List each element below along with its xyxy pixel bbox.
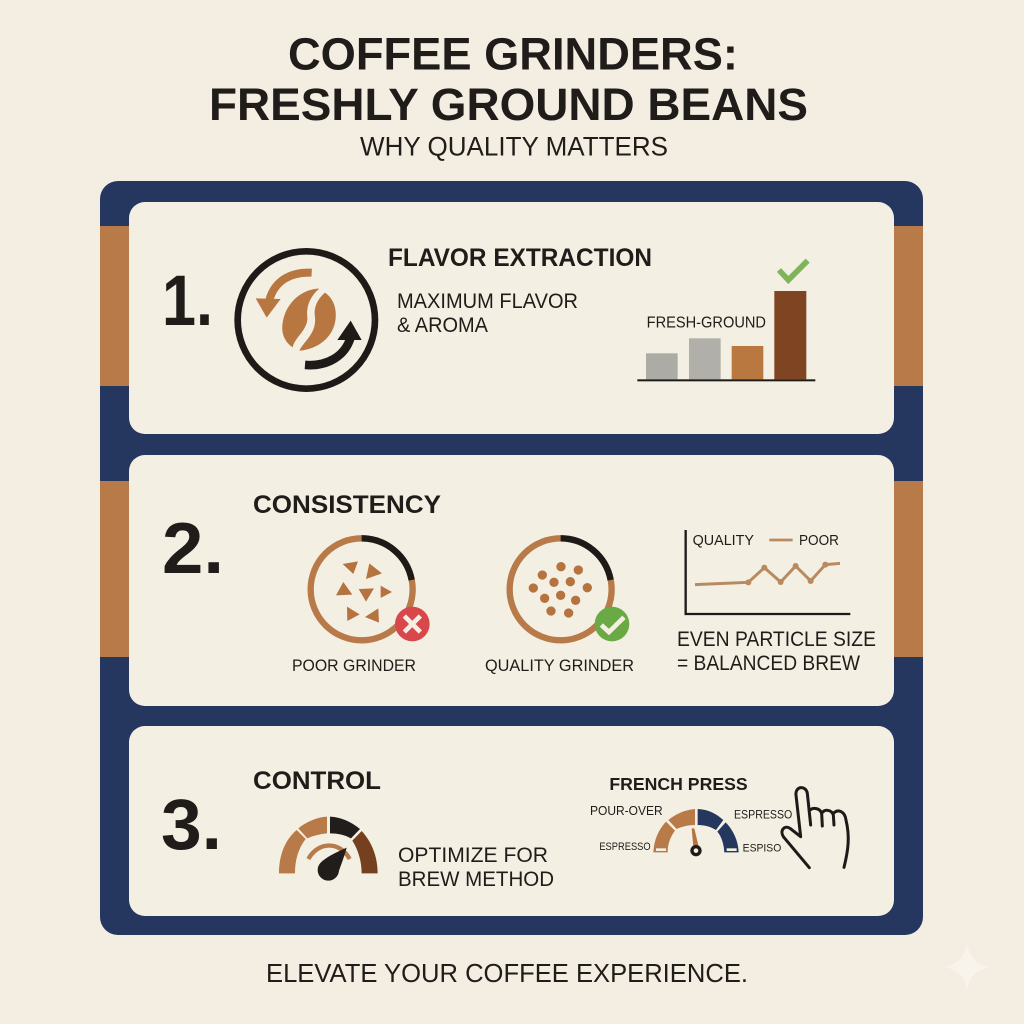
icon: pointing hand: [782, 788, 848, 868]
icon: quality grinder even particles: [510, 538, 629, 641]
navy frame with copper side bands: [100, 181, 923, 935]
label: quality grinder: QUALITY GRINDER: [485, 656, 634, 675]
subtitle: WHY QUALITY MATTERS: [360, 132, 668, 162]
icon: sparkle watermark: [944, 944, 990, 990]
line chart: quality vs poor: QUALITY: [693, 533, 754, 549]
title: COFFEE GRINDERS:: [288, 28, 738, 80]
heading: consistency: CONSISTENCY: [253, 491, 441, 519]
title: [209, 28, 808, 130]
text: even particle size: EVEN PARTICLE SIZE: [677, 628, 876, 651]
icon: coffee bean in rotating circle: [238, 251, 375, 389]
brew method gauge with labels: ESPRESSO: [599, 841, 651, 853]
label: poor grinder: POOR GRINDER: [292, 656, 416, 675]
panel: control: [129, 726, 894, 916]
number 3: 3.: [161, 786, 222, 865]
brew method gauge with labels: ESPISO: [743, 843, 782, 855]
text: even particle size: [677, 628, 876, 675]
heading: control: CONTROL: [253, 767, 381, 795]
brew method gauge with labels: POUR-OVER: [590, 804, 663, 818]
brew method gauge with labels: FRENCH PRESS: [609, 774, 748, 794]
number 2: 2.: [162, 509, 224, 589]
icon: poor grinder uneven particles: [311, 538, 430, 641]
title: FRESHLY GROUND BEANS: [209, 79, 808, 130]
text: maximum flavor and aroma: & AROMA: [397, 314, 488, 337]
line chart: quality vs poor: [686, 530, 850, 614]
bar chart: fresh-ground flavor: FRESH-GROUND: [647, 314, 766, 331]
text: maximum flavor and aroma: MAXIMUM FLAVOR: [397, 290, 578, 313]
number 1: 1.: [162, 262, 213, 341]
text: maximum flavor and aroma: [397, 290, 578, 337]
footer tagline: ELEVATE YOUR COFFEE EXPERIENCE.: [266, 958, 748, 988]
text: optimize for brew method: [398, 844, 554, 891]
text: optimize for brew method: OPTIMIZE FOR: [398, 844, 548, 867]
panel: flavor extraction: [129, 202, 894, 434]
brew method gauge with labels: ESPRESSO: [734, 807, 792, 821]
text: even particle size: = BALANCED BREW: [677, 652, 860, 675]
panel: consistency: [129, 455, 894, 706]
text: optimize for brew method: BREW METHOD: [398, 868, 554, 891]
heading: flavor extraction: FLAVOR EXTRACTION: [388, 244, 652, 272]
bar chart: fresh-ground flavor: [637, 261, 815, 381]
brew method gauge with labels: [590, 774, 792, 855]
line chart: quality vs poor: POOR: [799, 533, 839, 549]
icon: grind dial gauge: [279, 817, 378, 881]
